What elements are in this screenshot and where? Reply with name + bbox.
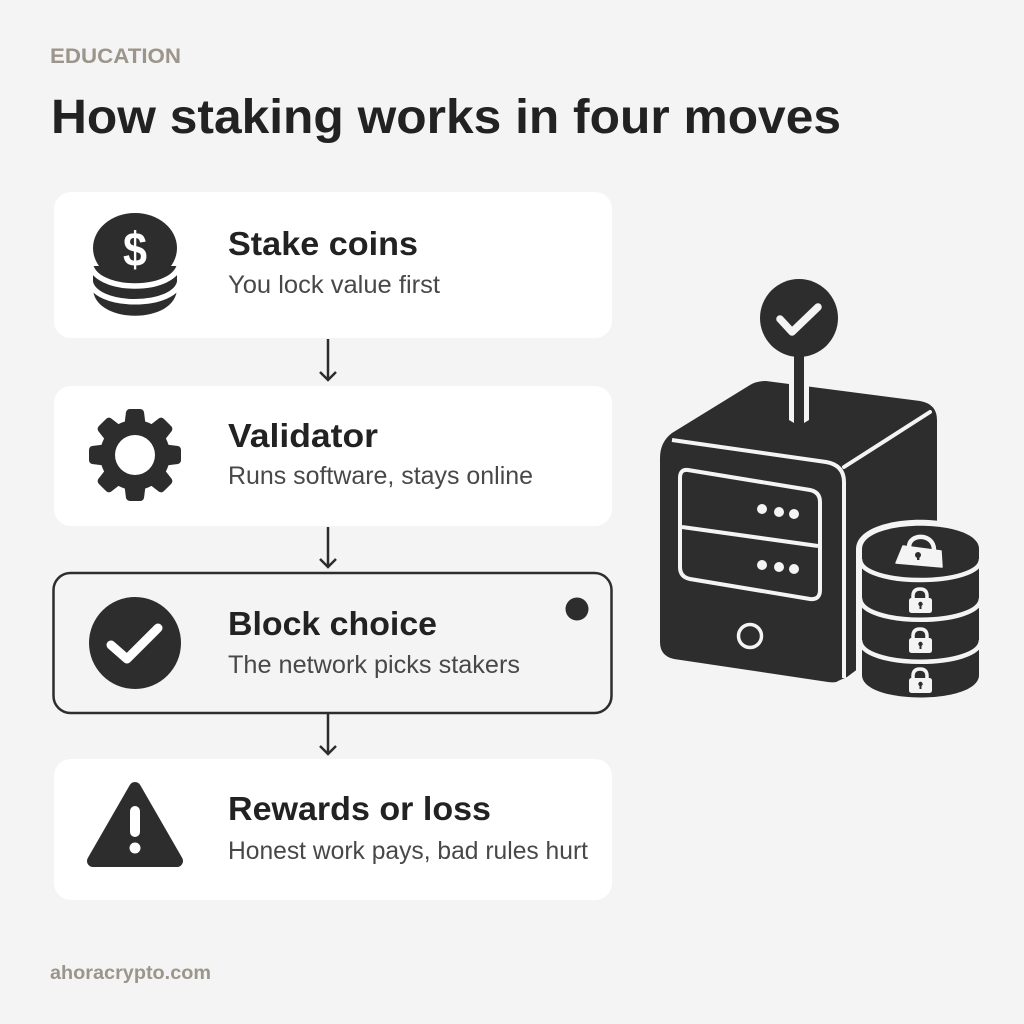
step description: The network picks stakers (228, 651, 520, 679)
validator check pin (760, 279, 838, 423)
lock: middle (909, 629, 932, 653)
panel: validator (54, 386, 612, 526)
step heading: Stake coins (228, 225, 418, 262)
server body (660, 381, 937, 682)
step heading: Rewards or loss (228, 790, 491, 827)
icon: gear (89, 409, 181, 501)
step heading: Validator (228, 417, 378, 454)
panel: rewards or loss (54, 759, 612, 900)
step description: Runs software, stays online (228, 462, 533, 490)
status dot (566, 598, 588, 620)
step heading: Block choice (228, 605, 437, 642)
step description: You lock value first (228, 271, 440, 299)
illustration: validator server with locked coins (660, 279, 984, 703)
footer source: ahoracrypto.com (50, 963, 211, 984)
arrow 1 (320, 339, 336, 380)
lock: upper (909, 589, 932, 613)
step description: Honest work pays, bad rules hurt (228, 837, 588, 865)
title: How staking works in four moves (51, 91, 841, 144)
panel: block choice (54, 573, 612, 713)
locked coin stack (856, 520, 984, 703)
lock: top (896, 537, 942, 567)
icon: check circle (89, 597, 181, 689)
icon: coin stack: $ (123, 224, 147, 277)
lock: lower (909, 669, 932, 693)
arrow 2 (320, 527, 336, 567)
arrow 3 (320, 714, 336, 754)
eyebrow label: EDUCATION (50, 45, 181, 68)
icon: warning triangle (93, 788, 177, 861)
panel: stake coins (54, 192, 612, 338)
icon: coin stack (90, 213, 180, 316)
